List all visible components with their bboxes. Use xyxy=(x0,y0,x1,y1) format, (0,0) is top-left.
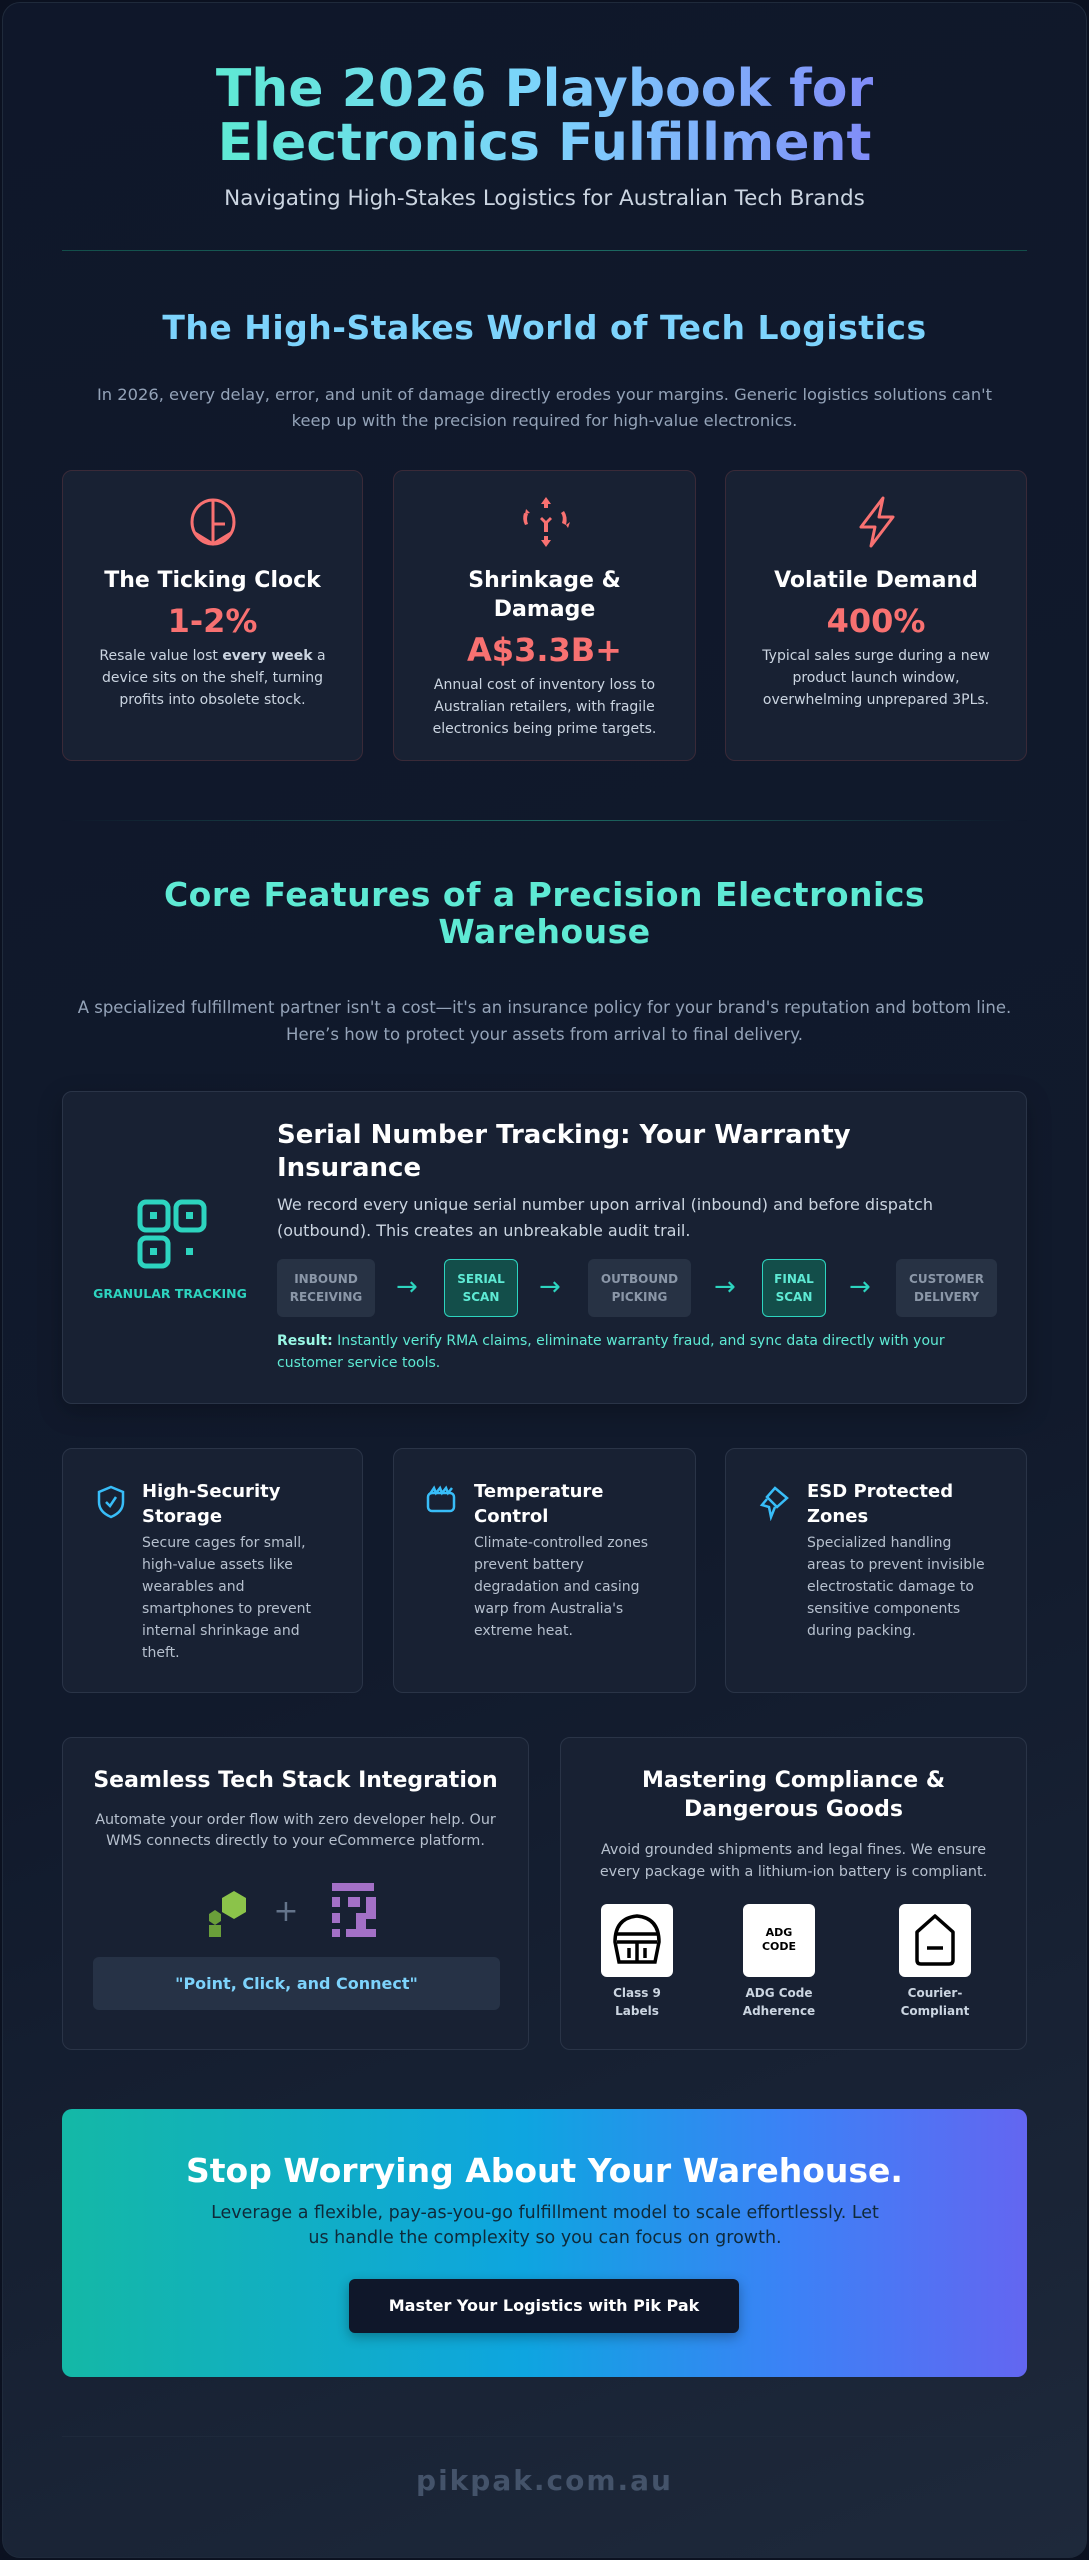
card: volatile demand: Volatile Demand xyxy=(774,568,978,593)
card: shrinkage: Damage xyxy=(494,597,595,622)
icon: plug xyxy=(760,1486,789,1521)
icon: granular tracking xyxy=(138,1200,206,1268)
text: ADG Code xyxy=(745,1986,813,2000)
title xyxy=(216,59,873,173)
text: Adherence xyxy=(743,2004,815,2018)
panel: compliance: Mastering Compliance & xyxy=(642,1768,945,1793)
heading: high stakes: The High-Stakes World of Tech Logistics xyxy=(162,308,927,347)
card: high-security storage: Secure cages for small, high-value assets like wearables and smartphones to prevent internal shrinkage and theft. xyxy=(142,1535,311,1661)
process flow xyxy=(277,1259,997,1317)
process flow: → xyxy=(849,1272,871,1302)
text: Courier- xyxy=(908,1986,962,2000)
process flow: → xyxy=(396,1272,418,1302)
text: Compliant xyxy=(901,2004,969,2018)
card: shrinkage: Annual cost of inventory loss to Australian retailers, with fragile electronics being prime targets. xyxy=(433,677,656,737)
card: shrinkage: A$3.3B+ xyxy=(467,631,622,669)
panel: compliance: Dangerous Goods xyxy=(684,1797,903,1822)
quote bar: "Point, Click, and Connect" xyxy=(175,1974,418,1993)
card: shrinkage: Shrinkage & xyxy=(468,568,621,593)
process flow: CUSTOMER xyxy=(909,1272,984,1286)
result text: Result: Instantly verify RMA claims, eliminate warranty fraud, and sync data directly with your customer service tools. xyxy=(277,1333,945,1371)
panel: tech stack integration: Automate your order flow with zero developer help. Our WMS connects directly to your eCommerce platform. xyxy=(95,1812,496,1849)
icon: integrations: + xyxy=(273,1894,299,1929)
subtitle: Navigating High-Stakes Logistics for Australian Tech Brands xyxy=(224,186,865,211)
title: The Ticking Clock xyxy=(104,568,321,593)
icon: ADG code: ADG xyxy=(766,1926,792,1939)
process flow: FINAL xyxy=(774,1272,814,1286)
card: ticking clock: Resale value lost every week a device sits on the shelf, turning profits into obsolete stock. xyxy=(99,648,326,708)
CTA button: Master Your Logistics with Pik Pak xyxy=(389,2296,699,2315)
icon: integrations xyxy=(209,1883,376,1937)
card: ESD zones xyxy=(725,1448,1027,1693)
title: Electronics Fulfillment xyxy=(218,113,871,173)
process flow: DELIVERY xyxy=(914,1290,979,1304)
icon: clock xyxy=(190,498,236,546)
process flow: OUTBOUND xyxy=(601,1272,678,1286)
panel: compliance: Avoid grounded shipments and legal fines. We ensure every package with a lithium-ion battery is compliant. xyxy=(600,1842,987,1880)
card: ESD zones: ESD Protected Zones xyxy=(807,1481,953,1527)
icon: shield xyxy=(98,1486,124,1518)
intro paragraph: In 2026, every delay, error, and unit of damage directly erodes your margins. Generic logistics solutions can't keep up with the precision required for high-value electronics. xyxy=(97,385,992,430)
icon: thermometer box xyxy=(426,1486,456,1512)
card: shrinkage xyxy=(393,470,696,761)
card: high-security storage xyxy=(62,1448,363,1693)
icon: courier xyxy=(899,1904,971,1977)
quote bar xyxy=(93,1957,500,2010)
process flow: → xyxy=(714,1272,736,1302)
card: high-security storage: High-Security Storage xyxy=(142,1481,280,1527)
card: temperature control: Temperature Control xyxy=(474,1481,603,1527)
heading: core features: Core Features of a Precision Electronics Warehouse xyxy=(164,875,925,951)
card: ESD zones: Specialized handling areas to prevent invisible electrostatic damage to sensitive components during packing. xyxy=(807,1535,985,1639)
panel: tech stack integration: Seamless Tech Stack Integration xyxy=(93,1768,498,1793)
text: Labels xyxy=(615,2004,659,2018)
CTA button xyxy=(349,2279,739,2333)
icon: class 9 xyxy=(601,1904,673,1977)
panel: serial number tracking xyxy=(62,1091,1027,1404)
card: temperature control xyxy=(393,1448,696,1693)
footer url: pikpak.com.au xyxy=(416,2464,673,2497)
CTA banner: Leverage a flexible, pay-as-you-go fulfillment model to scale effortlessly. Let us handle the complexity so you can focus on growth. xyxy=(211,2203,879,2248)
title: The 2026 Playbook for xyxy=(216,59,873,119)
serial description: We record every unique serial number upon arrival (inbound) and before dispatch (outbound). This creates an unbreakable audit trail. xyxy=(277,1195,933,1240)
text: Class 9 xyxy=(613,1986,661,2000)
CTA banner: Stop Worrying About Your Warehouse. xyxy=(186,2151,903,2190)
icon: ADG code xyxy=(743,1904,815,1977)
process flow: RECEIVING xyxy=(290,1290,362,1304)
process flow: SERIAL xyxy=(457,1272,505,1286)
process flow: → xyxy=(539,1272,561,1302)
panel: tech stack integration xyxy=(62,1737,529,2050)
card: volatile demand: 400% xyxy=(827,602,925,640)
process flow: PICKING xyxy=(612,1290,667,1304)
card: temperature control: Climate-controlled zones prevent battery degradation and casing warp from Australia's extreme heat. xyxy=(474,1535,648,1639)
intro paragraph 2: A specialized fulfillment partner isn't a cost—it's an insurance policy for your brand's reputation and bottom line. Here’s how to protect your assets from arrival to final delivery. xyxy=(78,998,1011,1044)
panel: compliance xyxy=(560,1737,1027,2050)
serial title: Serial Number Tracking: Your Warranty Insurance xyxy=(277,1120,851,1183)
CTA banner xyxy=(62,2109,1027,2377)
value: 1-2% xyxy=(168,602,257,640)
card: volatile demand xyxy=(725,470,1027,761)
card: ticking clock xyxy=(62,470,363,761)
icon: lightning xyxy=(859,496,895,548)
card: volatile demand: Typical sales surge during a new product launch window, overwhelming unprepared 3PLs. xyxy=(762,648,990,708)
icon: ADG code: CODE xyxy=(762,1940,796,1953)
icon: dispersal xyxy=(523,497,570,547)
process flow: SCAN xyxy=(776,1290,812,1304)
process flow: SCAN xyxy=(463,1290,499,1304)
process flow: INBOUND xyxy=(294,1272,358,1286)
label: granular tracking: GRANULAR TRACKING xyxy=(93,1286,247,1301)
